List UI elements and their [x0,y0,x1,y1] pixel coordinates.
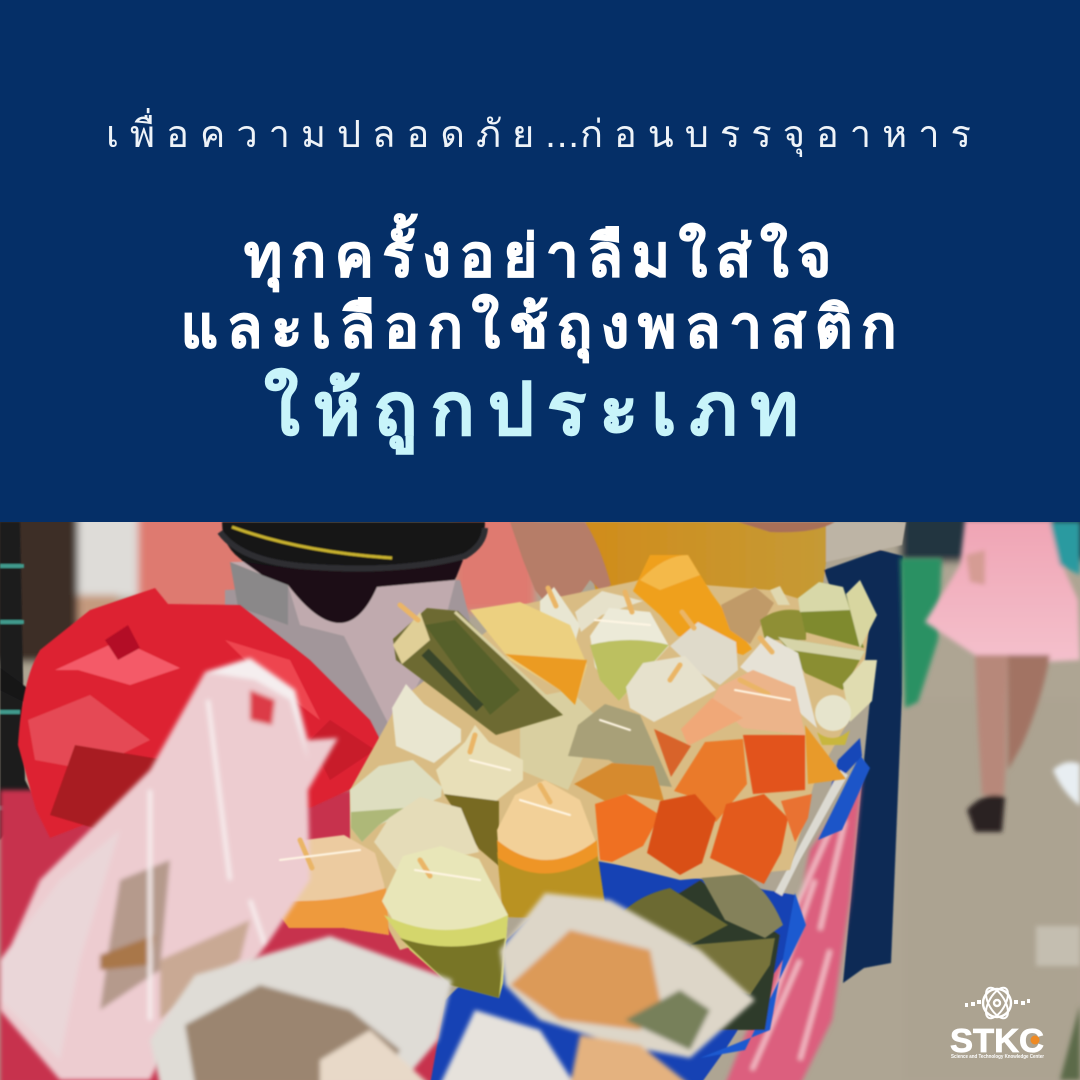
logo wordmark: STKC [950,1022,1044,1059]
front soup bags [265,780,605,998]
logo: STKC [950,986,1045,1060]
foreground wrapped food bags [150,893,755,1080]
pile underlay [350,580,870,950]
photo: market stall with plastic food bags [0,522,1080,1080]
front right bag with orange filling [500,893,755,1058]
black bucket on grey stove [220,522,485,780]
blue crate [430,738,870,1080]
banana-leaf parcels [623,868,783,995]
logo orange dot [1030,1036,1040,1044]
vendor hand [510,522,611,606]
bag knots and highlights [280,588,790,880]
red plastic bag [18,588,388,838]
large clear plastic bag foreground [0,658,338,1080]
girl in pink dress [925,520,1080,1080]
back row bags [520,555,877,790]
logo emblem [965,984,1030,1022]
dark post with teal straps [0,522,44,840]
heading line 3 highlighted: ให้ถูกประเภท [264,370,812,450]
tall orange bag [633,555,752,655]
tablecloth [0,777,862,1080]
orange and red bags [568,670,846,884]
heading line 1: ทุกครั้งอย่าลืมใส่ใจ [244,224,840,289]
background street [0,512,1080,1080]
subtitle: เพื่อความปลอดภัย...ก่อนบรรจุอาหาร [106,114,982,156]
vendor shirt and skirt [585,522,906,983]
panel: navy heading block [0,0,1080,522]
heading line 2: และเลือกใช้ถุงพลาสติก [181,295,905,360]
green bucket [900,558,942,708]
leaf and soup bags at centre left [350,602,587,870]
